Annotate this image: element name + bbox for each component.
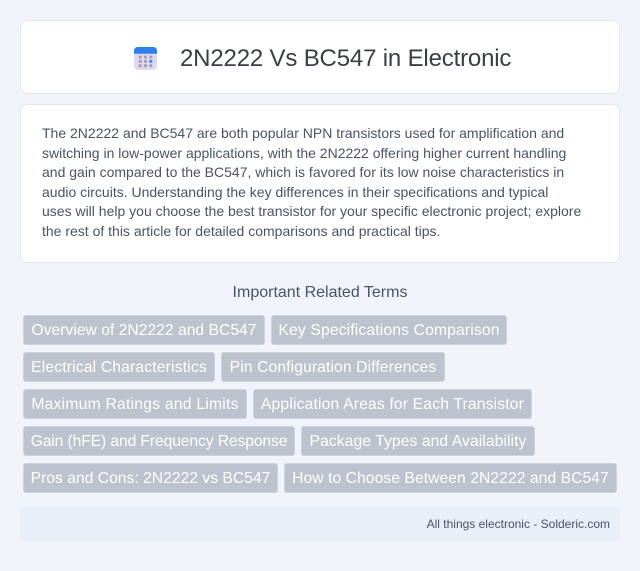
- tag: Gain (hFE) and Frequency Response: [31, 433, 287, 450]
- tag: [23, 463, 278, 493]
- title: 2N2222 Vs BC547 in Electronic: [180, 45, 511, 72]
- related terms heading: Important Related Terms: [233, 284, 407, 301]
- tag: [271, 315, 507, 345]
- tag: [221, 352, 445, 382]
- intro paragraph: [42, 125, 581, 239]
- tag: Application Areas for Each Transistor: [261, 396, 524, 413]
- tag: Package Types and Availability: [310, 433, 526, 450]
- header panel: [20, 20, 620, 94]
- tag: Key Specifications Comparison: [278, 322, 500, 339]
- tag: [301, 426, 535, 456]
- footer text: All things electronic - Solderic.com: [427, 517, 610, 531]
- tag: Maximum Ratings and Limits: [31, 396, 239, 413]
- intro paragraph: The 2N2222 and BC547 are both popular NPN transistors used for amplification and: [42, 125, 564, 141]
- intro text panel: [20, 104, 620, 263]
- intro paragraph: the rest of this article for detailed comparisons and practical tips.: [42, 223, 440, 239]
- icon: calendar: [134, 47, 158, 70]
- tag: [23, 389, 247, 419]
- footer bar: [20, 507, 620, 541]
- tag: [23, 352, 215, 382]
- intro paragraph: audio circuits. Understanding the key differences in their specifications and typical: [42, 184, 548, 200]
- tag: Electrical Characteristics: [31, 359, 207, 376]
- intro paragraph: and gain compared to the BC547, which is favored for its low noise characteristics in: [42, 164, 564, 180]
- tag: Overview of 2N2222 and BC547: [32, 322, 256, 339]
- tag: [253, 389, 532, 419]
- tag: [284, 463, 617, 493]
- intro paragraph: uses will help you choose the best transistor for your specific electronic project; explore: [42, 203, 581, 219]
- tag: How to Choose Between 2N2222 and BC547: [292, 470, 609, 487]
- tag: [23, 426, 295, 456]
- tag: Pin Configuration Differences: [230, 359, 436, 376]
- tag: [23, 315, 265, 345]
- tag: Pros and Cons: 2N2222 vs BC547: [31, 470, 270, 487]
- related terms tags: [23, 315, 617, 493]
- intro paragraph: switching in low-power applications, with the 2N2222 offering higher current handling: [42, 145, 566, 161]
